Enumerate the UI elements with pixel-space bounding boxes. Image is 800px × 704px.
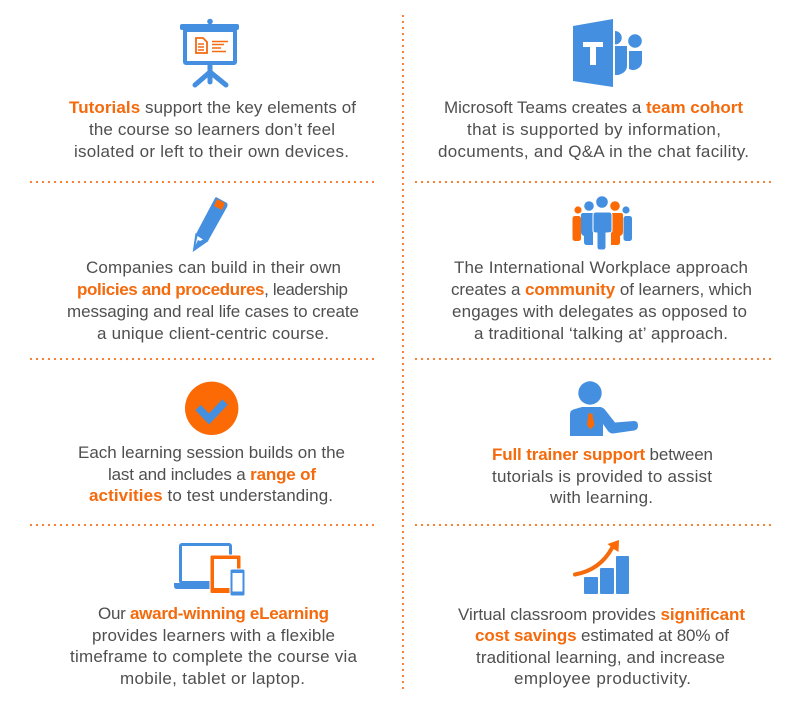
panel: tutorials: isolated or left to their own devices. bbox=[74, 142, 349, 161]
panel: cost savings: employee productivity. bbox=[514, 669, 691, 688]
panel: trainer support bbox=[492, 381, 713, 507]
text: elearning: Our award-winning eLearning bbox=[98, 604, 329, 623]
text: trainer support: Full trainer support between bbox=[492, 445, 713, 464]
icon: trainer figure bbox=[570, 381, 638, 436]
panel: policies bbox=[67, 197, 359, 343]
text: community: The International Workplace approach bbox=[454, 258, 748, 277]
icon: pencil bbox=[193, 197, 228, 252]
text: learning sessions: Each learning session builds on the bbox=[78, 443, 345, 462]
panel: learning sessions: activities to test understanding. bbox=[89, 486, 333, 505]
panel: microsoft teams: documents, and Q&A in the chat facility. bbox=[438, 142, 749, 161]
panel: community: creates a community of learners, which bbox=[451, 280, 752, 299]
panel: community: a traditional ‘talking at’ approach. bbox=[474, 324, 728, 343]
panel: microsoft teams bbox=[438, 19, 749, 161]
icon: rising bar chart bbox=[575, 540, 629, 594]
text: tutorials: Tutorials support the key elements of bbox=[69, 98, 356, 117]
icon: microsoft teams logo bbox=[573, 19, 642, 87]
panel: trainer support: with learning. bbox=[549, 488, 653, 507]
icon: check mark badge bbox=[185, 382, 238, 435]
panel: elearning: provides learners with a flexible bbox=[92, 626, 335, 645]
panel: policies: messaging and real life cases to create bbox=[67, 302, 359, 321]
panel: tutorials bbox=[69, 19, 356, 161]
panel: cost savings: cost savings estimated at 80% of bbox=[475, 626, 729, 645]
panel: cost savings bbox=[458, 540, 745, 688]
text: microsoft teams: Microsoft Teams creates a team cohort bbox=[444, 98, 743, 117]
panel: community: engages with delegates as opposed to bbox=[452, 302, 747, 321]
panel: microsoft teams: that is supported by information, bbox=[467, 120, 721, 139]
panel: policies: a unique client-centric course. bbox=[97, 324, 329, 343]
panel: elearning: timeframe to complete the course via bbox=[70, 647, 358, 666]
panel: community bbox=[451, 196, 752, 343]
panel: elearning bbox=[70, 544, 358, 688]
panel: learning sessions: last and includes a range of bbox=[108, 465, 316, 484]
panel: elearning: mobile, tablet or laptop. bbox=[120, 669, 305, 688]
panel: learning sessions bbox=[78, 382, 345, 505]
icon: group of people bbox=[572, 196, 632, 250]
icon: presentation board bbox=[180, 19, 239, 85]
icon: laptop, tablet and phone bbox=[174, 544, 245, 596]
panel: trainer support: tutorials is provided to assist bbox=[492, 467, 712, 486]
text: cost savings: Virtual classroom provides significant bbox=[458, 605, 745, 624]
panel: cost savings: traditional learning, and increase bbox=[476, 648, 725, 667]
text: policies: Companies can build in their own bbox=[86, 258, 341, 277]
panel: tutorials: the course so learners don’t feel bbox=[89, 120, 335, 139]
panel: policies: policies and procedures, leadership bbox=[77, 280, 348, 299]
